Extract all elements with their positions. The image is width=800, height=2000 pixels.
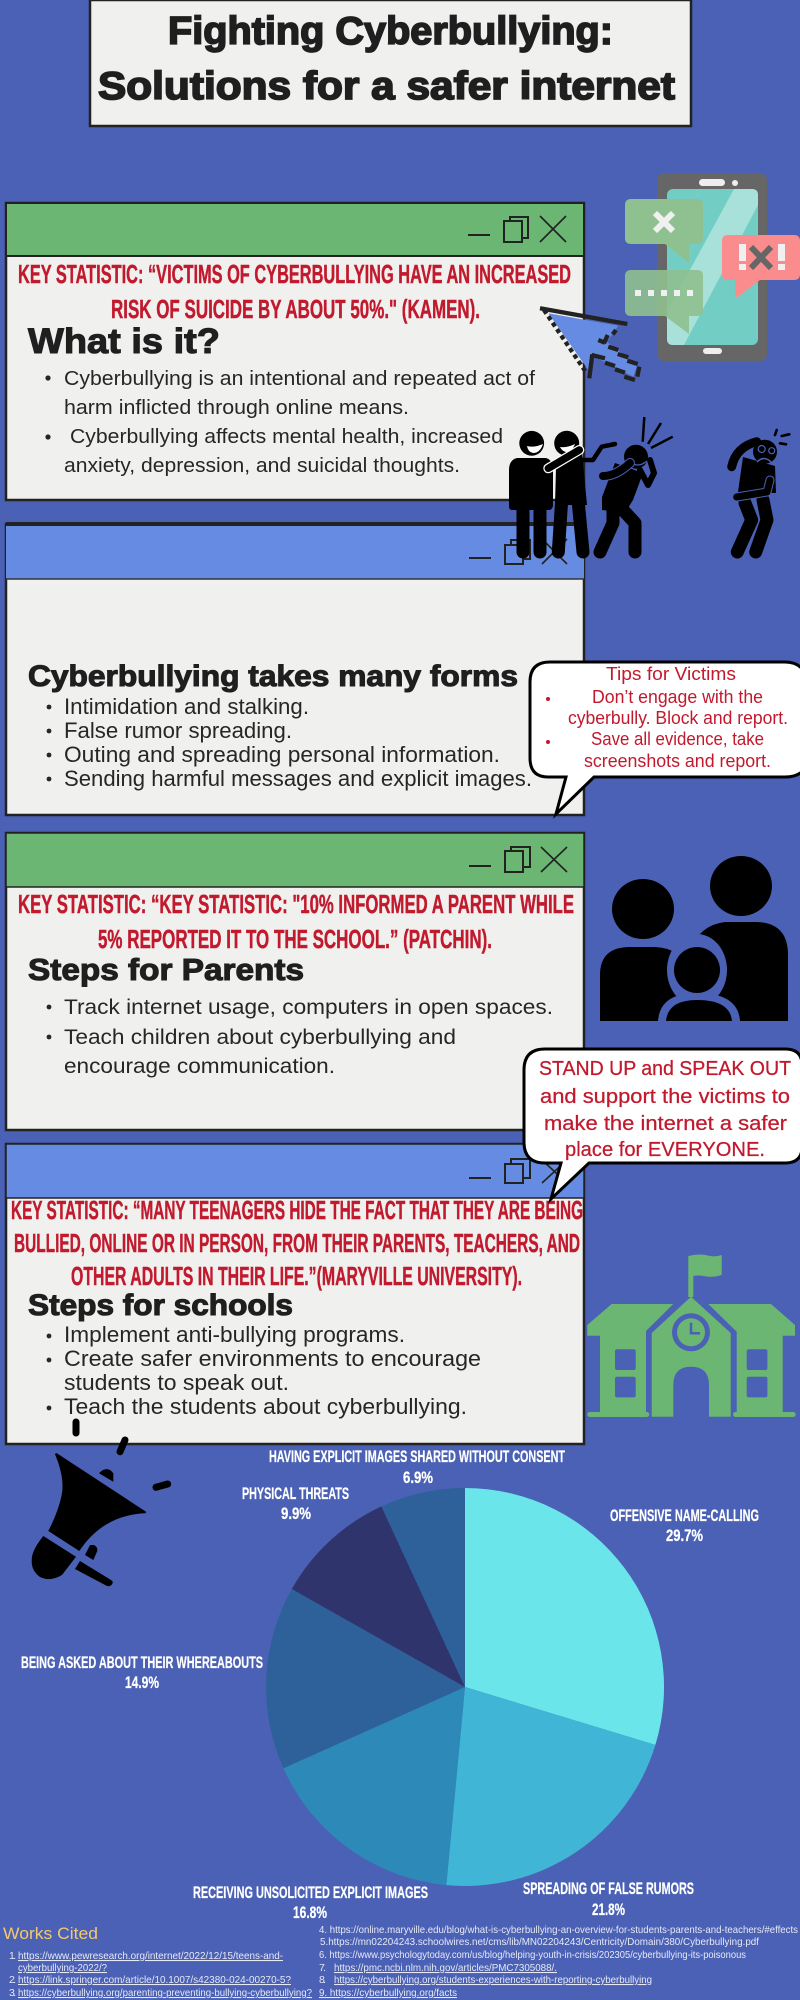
bullet list: Outing and spreading personal information.: [64, 742, 500, 767]
callout: stand up and speak out: and support the victims to: [540, 1086, 790, 1108]
citations left column: 3.: [9, 1987, 16, 1999]
pie label: whereabouts: [21, 1654, 263, 1692]
bullet list: Teach the students about cyberbullying.: [64, 1394, 467, 1419]
key statistic: OTHER ADULTS IN THEIR LIFE.”(MARYVILLE UNIVERSITY).: [71, 1263, 522, 1291]
figure: victim covering face: [600, 417, 673, 552]
title: [90, 0, 691, 126]
bullet list: anxiety, depression, and suicidal thoughts.: [64, 455, 460, 477]
pie label: receiving unsolicited explicit images: RECEIVING UNSOLICITED EXPLICIT IMAGES: [193, 1884, 428, 1902]
pie chart: [21, 1448, 759, 1922]
slice: offensive name-calling: [465, 1488, 664, 1745]
bullet list: students to speak out.: [64, 1370, 289, 1395]
icon: phone with chat bubbles: [625, 173, 800, 361]
citations right column: 5.https://mn02204243.schoolwires.net/cms/lib/MN02204243/Centricity/Domain/380/Cyberbullying.pdf: [320, 1936, 759, 1948]
callout: stand up and speak out: place for EVERYONE.: [565, 1139, 765, 1161]
panel: steps for schools: [6, 1144, 584, 1444]
pie label: receiving unsolicited explicit images: [193, 1884, 428, 1922]
window header bar: [6, 833, 584, 887]
citations left column: 1.: [9, 1950, 16, 1962]
slice: spreading of false rumors: [446, 1687, 655, 1886]
bullet list: [47, 1322, 481, 1419]
panel: what is it: [6, 203, 584, 500]
pie label: receiving unsolicited explicit images: 16.8%: [293, 1904, 327, 1922]
bullet list: False rumor spreading.: [64, 718, 292, 743]
panel: forms of cyberbullying: [6, 524, 584, 815]
heading: many forms: Cyberbullying takes many forms: [28, 660, 518, 693]
pie label: offensive name-calling: [610, 1507, 759, 1545]
pie label: explicit images shared: 6.9%: [403, 1469, 433, 1487]
bullet list: Create safer environments to encourage: [64, 1346, 481, 1371]
pie label: offensive name-calling: 29.7%: [666, 1527, 703, 1545]
icon: pixel cursor arrow: [540, 308, 639, 380]
callout: tips for victims: screenshots and report.: [584, 751, 771, 771]
panel: steps for parents: [6, 833, 584, 1130]
citations left column: https://cyberbullying.org/parenting-preventing-bullying-cyberbullying?: [18, 1987, 312, 1999]
key statistic: RISK OF SUICIDE BY ABOUT 50%." (KAMEN).: [111, 296, 480, 324]
callout: tips for victims: Tips for Victims: [606, 664, 736, 684]
citations left column: https://link.springer.com/article/10.1007/s42380-024-00270-5?: [18, 1974, 291, 1986]
callout: stand up and speak out: make the internet a safer: [544, 1113, 787, 1135]
bullet list: [47, 996, 553, 1078]
citations left column: 2.: [9, 1974, 16, 1986]
callout: tips for victims: Save all evidence, take: [591, 729, 764, 749]
pie label: whereabouts: 14.9%: [125, 1674, 159, 1692]
citations right column: 6. https://www.psychologytoday.com/us/blog/helping-youth-in-crisis/202305/cyberbullying-its-poisonous: [319, 1949, 746, 1961]
pie label: physical threats: PHYSICAL THREATS: [242, 1485, 349, 1503]
icon: bullies pointing at victim: [509, 417, 789, 552]
citations right column: 7.: [319, 1962, 326, 1974]
pie label: spreading of false rumors: [523, 1880, 694, 1919]
window header bar: [6, 203, 584, 256]
slice: physical threats: [292, 1506, 465, 1687]
bullet list: Implement anti-bullying programs.: [64, 1322, 405, 1347]
citations left column: cyberbullying-2022/?: [18, 1962, 107, 1974]
pie label: physical threats: 9.9%: [281, 1505, 311, 1523]
key statistic: [18, 891, 574, 954]
figure: distressed bystander: [732, 430, 789, 552]
callout: tips for victims: [530, 662, 800, 814]
window header bar: [6, 1144, 584, 1198]
callout: stand up and speak out: STAND UP and SPEAK OUT: [539, 1058, 791, 1080]
bullet list: encourage communication.: [64, 1055, 335, 1078]
citations right column: [319, 1924, 798, 1999]
heading: what is it: What is it?: [28, 322, 220, 361]
bullet list: Cyberbullying affects mental health, increased: [70, 426, 503, 448]
slice: whereabouts: [266, 1589, 465, 1768]
title: Fighting Cyberbullying:: [168, 10, 613, 53]
callout: stand up and speak out: [524, 1049, 800, 1199]
pie label: spreading of false rumors: 21.8%: [592, 1901, 625, 1919]
key statistic: [18, 261, 571, 324]
citations right column: https://cyberbullying.org/students-experiences-with-reporting-cyberbullying: [334, 1974, 652, 1986]
heading: steps for parents: Steps for Parents: [28, 952, 304, 987]
bullet list: Sending harmful messages and explicit images.: [64, 766, 532, 791]
pie label: spreading of false rumors: SPREADING OF FALSE RUMORS: [523, 1880, 694, 1898]
citations left column: https://www.pewresearch.org/internet/2022/12/15/teens-and-: [18, 1950, 283, 1962]
figure: bully one: [509, 431, 553, 552]
slice: receiving unsolicited explicit images: [283, 1687, 465, 1885]
icon: family: [600, 856, 788, 1021]
heading: steps for schools: Steps for schools: [28, 1289, 293, 1322]
title: Solutions for a safer internet: [98, 65, 675, 108]
callout: tips for victims: cyberbully. Block and report.: [568, 708, 788, 728]
pie label: physical threats: [242, 1485, 349, 1523]
key statistic: 5% REPORTED IT TO THE SCHOOL.” (PATCHIN).: [98, 926, 492, 954]
icon: megaphone: [32, 1422, 168, 1586]
icon: school building: [587, 1254, 796, 1417]
bullet list: harm inflicted through online means.: [64, 397, 409, 419]
bullet list: Track internet usage, computers in open spaces.: [64, 996, 553, 1019]
pie label: explicit images shared: [269, 1448, 565, 1487]
slice: explicit images shared: [381, 1488, 465, 1687]
citations left column: [9, 1950, 312, 1999]
bullet list: [45, 368, 535, 477]
pie label: explicit images shared: HAVING EXPLICIT IMAGES SHARED WITHOUT CONSENT: [269, 1448, 565, 1466]
callout: tips for victims: Don’t engage with the: [592, 687, 763, 707]
pie label: whereabouts: BEING ASKED ABOUT THEIR WHEREABOUTS: [21, 1654, 263, 1672]
citations right column: https://pmc.ncbi.nlm.nih.gov/articles/PMC7305088/.: [334, 1962, 557, 1974]
bullet list: Cyberbullying is an intentional and repeated act of: [64, 368, 535, 390]
figure: bully two: [548, 431, 615, 552]
works cited heading: Works Cited: [3, 1924, 98, 1943]
key statistic: [11, 1197, 583, 1291]
citations right column: 9. https://cyberbullying.org/facts: [319, 1987, 457, 1999]
bullet list: Intimidation and stalking.: [64, 694, 309, 719]
citations right column: 8.: [319, 1974, 326, 1986]
bullet list: Teach children about cyberbullying and: [64, 1026, 456, 1049]
window header bar: [6, 524, 584, 579]
bullet list: [47, 694, 532, 791]
